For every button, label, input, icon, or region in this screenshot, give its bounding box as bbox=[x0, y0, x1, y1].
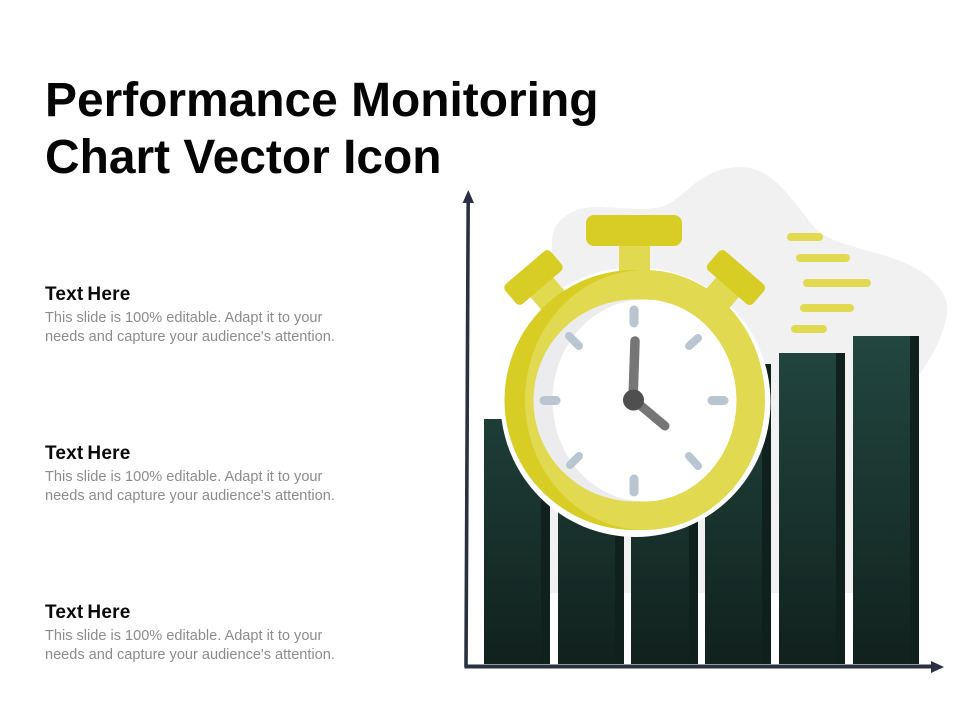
title bbox=[45, 74, 598, 184]
text block 1: This slide is 100% editable. Adapt it to your bbox=[45, 310, 322, 326]
text block 1: needs and capture your audience's attention. bbox=[45, 328, 335, 344]
left side button bbox=[502, 248, 581, 325]
clock face shadow bbox=[534, 300, 736, 502]
background blob bbox=[484, 167, 947, 593]
text block 3: This slide is 100% editable. Adapt it to your bbox=[45, 628, 322, 644]
bar 3 bbox=[631, 440, 698, 664]
text block 3 bbox=[45, 602, 335, 662]
bar 2 bbox=[558, 440, 624, 664]
clock pivot bbox=[623, 390, 644, 410]
bar 5 bbox=[779, 353, 845, 664]
outer ring light bbox=[525, 270, 765, 530]
hour ticks bbox=[544, 310, 724, 492]
clock face bbox=[552, 300, 736, 502]
title: Chart Vector Icon bbox=[45, 131, 442, 184]
bar 4 bbox=[705, 364, 771, 664]
white halo bbox=[500, 267, 770, 537]
bar chart bbox=[484, 336, 919, 664]
text block 1 bbox=[45, 284, 335, 344]
title: Performance Monitoring bbox=[45, 74, 598, 127]
stem and top button bbox=[586, 215, 682, 280]
text block 2 bbox=[45, 443, 335, 504]
vertical axis arrow bbox=[463, 190, 474, 667]
text block 2: This slide is 100% editable. Adapt it to your bbox=[45, 469, 322, 485]
bar 6 bbox=[853, 336, 919, 664]
horizontal axis arrow bbox=[464, 661, 944, 673]
bar 1 bbox=[484, 419, 550, 664]
outer ring dark bbox=[504, 270, 764, 530]
text block 3: Text Here bbox=[45, 602, 130, 623]
text block 1: Text Here bbox=[45, 284, 130, 305]
right side button bbox=[686, 248, 767, 329]
clock hands bbox=[633, 341, 665, 426]
text block 2: Text Here bbox=[45, 443, 130, 464]
stopwatch bbox=[500, 215, 770, 537]
speed lines bbox=[787, 233, 871, 333]
text block 3: needs and capture your audience's attention. bbox=[45, 646, 335, 662]
text block 2: needs and capture your audience's attention. bbox=[45, 488, 335, 504]
